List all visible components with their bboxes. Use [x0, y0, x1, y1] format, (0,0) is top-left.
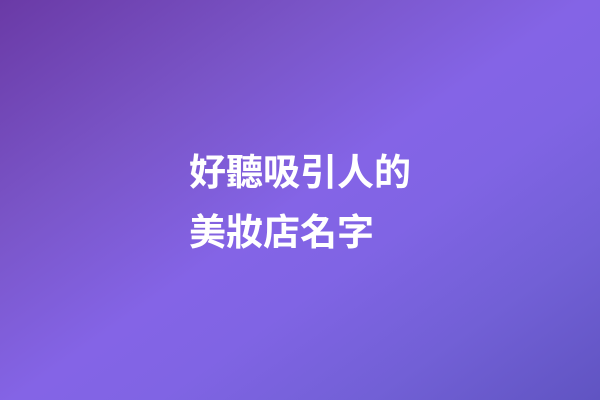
- title: 美妝店名字: [189, 212, 374, 253]
- title: [189, 152, 411, 253]
- title: 好聽吸引人的: [189, 152, 411, 193]
